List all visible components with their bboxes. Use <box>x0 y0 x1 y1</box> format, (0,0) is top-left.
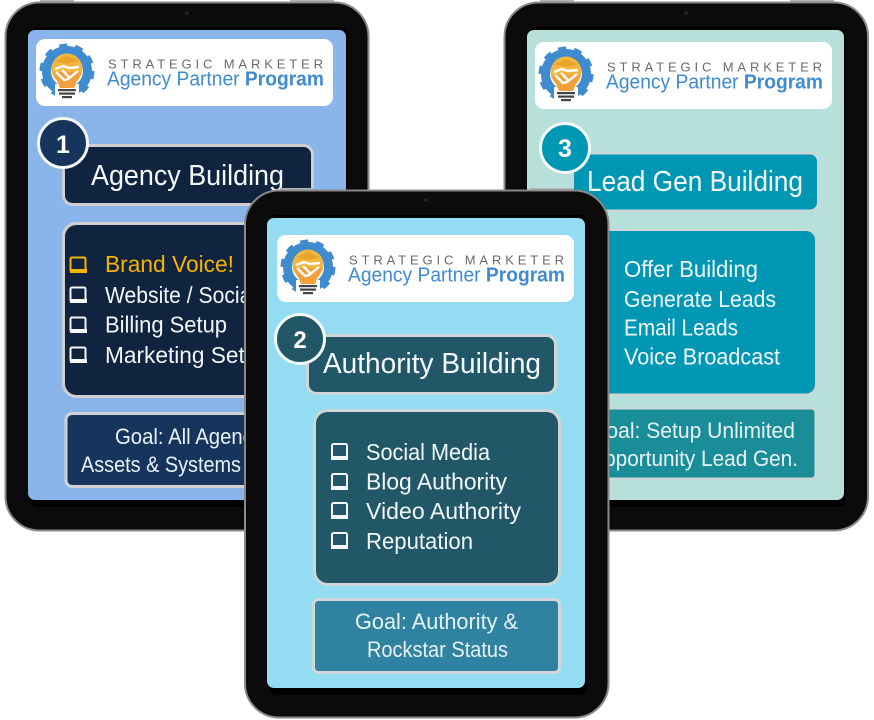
tablet 3 number badge <box>540 124 590 172</box>
tablet 3 number badge: 3 <box>558 135 572 163</box>
item: generate leads: Generate Leads <box>624 286 776 312</box>
item: website and social: Website / Social <box>105 282 256 308</box>
item: email leads: Email Leads <box>624 314 738 340</box>
tablet 1 logo <box>36 39 333 106</box>
tablet 2 number badge: 2 <box>293 327 307 354</box>
tablet 3 list panel <box>570 230 816 394</box>
item: marketing setup: Marketing Setup <box>105 342 270 368</box>
tablet 1 goal box: Assets & Systems <box>81 452 241 477</box>
tablet 2 logo: Agency Partner Program <box>348 264 565 286</box>
tablet 2 goal box <box>314 600 560 672</box>
tablet 2 screen <box>267 218 585 688</box>
tablet 3 heading: Lead Gen Building <box>587 166 803 198</box>
item: billing setup: Billing Setup <box>105 312 227 338</box>
tablet 3: lead gen building <box>504 0 868 530</box>
tablet 1 logo: Agency Partner Program <box>107 68 324 90</box>
tablet 2 goal box: Goal: Authority & <box>355 609 518 634</box>
tablet 2 bezel <box>245 190 608 718</box>
tablet 1 heading: Agency Building <box>91 160 284 192</box>
tablet 2 logo: STRATEGIC MARKETER <box>349 252 564 268</box>
tablet 3 goal box: Goal: Setup Unlimited <box>590 418 795 443</box>
tablet 1 bezel <box>6 2 368 530</box>
tablet 2 goal box: Rockstar Status <box>367 637 508 662</box>
tablet 3 logo <box>535 42 832 109</box>
tablet 1 heading <box>64 146 312 204</box>
tablet 3 screen <box>527 30 844 500</box>
tablet 1 screen <box>28 30 346 500</box>
tablet 3 goal box <box>570 408 816 478</box>
tablet 3 bezel <box>504 2 868 530</box>
tablet 1 logo: STRATEGIC MARKETER <box>108 56 323 72</box>
item: social media: Social Media <box>366 439 490 465</box>
tablet 2 number badge <box>276 314 324 364</box>
tablet 2 heading <box>308 336 556 394</box>
tablet 1 checklist panel <box>64 224 326 396</box>
tablet 3 goal box: Opportunity Lead Gen. <box>588 446 798 471</box>
highlighted item: brand voice: Brand Voice! <box>105 251 234 277</box>
tablet 3 logo: Agency Partner Program <box>606 70 823 94</box>
tablet 3 heading <box>573 154 818 210</box>
tablet 2 logo <box>277 235 574 302</box>
item: reputation: Reputation <box>366 528 473 554</box>
tablet 1 goal box: Goal: All Agency <box>115 424 263 449</box>
tablet 2: authority building <box>245 188 608 718</box>
tablet 1: agency building <box>6 0 368 530</box>
tablet 1 number badge <box>38 118 88 168</box>
item: voice broadcast: Voice Broadcast <box>624 344 781 370</box>
tablet 2 checklist panel <box>314 410 560 584</box>
tablet 1 goal box <box>66 414 326 486</box>
tablet 3 logo: STRATEGIC MARKETER <box>607 60 822 74</box>
item: video authority: Video Authority <box>366 498 522 524</box>
item: offer building: Offer Building <box>624 256 758 282</box>
tablet 2 heading: Authority Building <box>323 348 541 380</box>
tablet 1 number badge: 1 <box>56 131 70 159</box>
item: blog authority: Blog Authority <box>366 468 507 494</box>
